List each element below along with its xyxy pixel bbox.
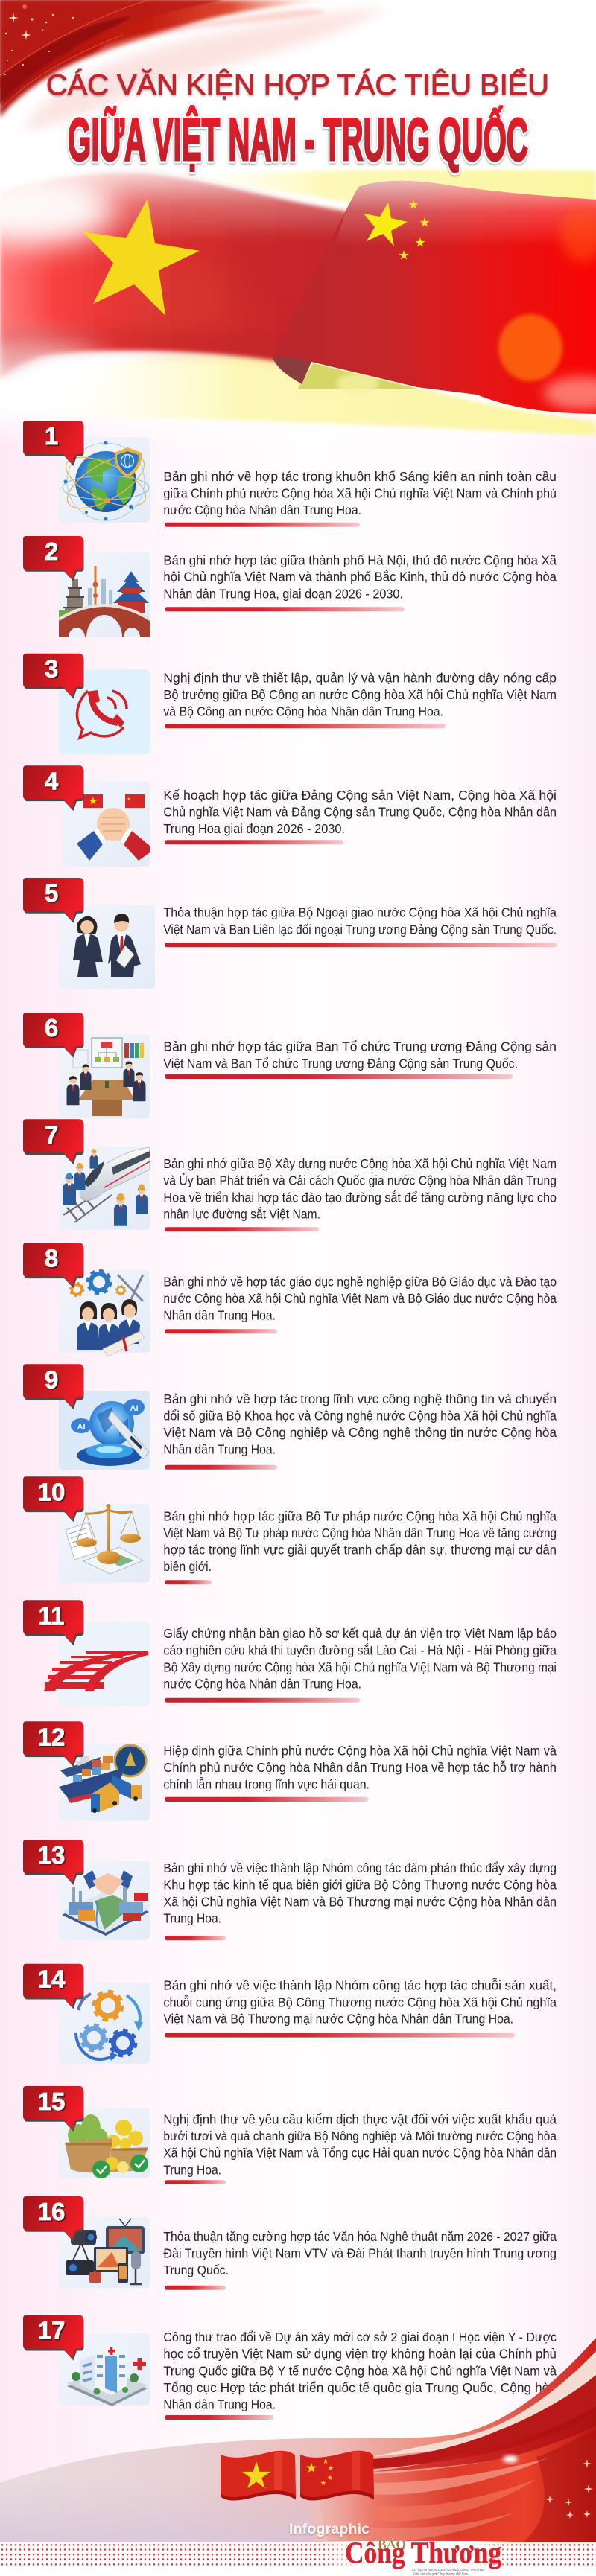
number badge 3 xyxy=(23,654,83,698)
image: globe and shield xyxy=(59,437,153,523)
number badge 5 xyxy=(23,878,83,923)
item 11 xyxy=(23,1600,557,1706)
text: Bản ghi nhớ về hợp tác giáo dục nghề nghiệp giữa Bộ Giáo dục và Đào tạo xyxy=(163,1274,557,1289)
text xyxy=(163,1156,557,1222)
text: Việt Nam và Bộ Công nghiệp và Công nghệ thông tin nước Cộng hòa xyxy=(163,1425,557,1440)
underline xyxy=(165,1580,212,1584)
number badge 4 xyxy=(23,765,83,811)
underline xyxy=(165,1936,226,1940)
number badge 2 xyxy=(23,536,83,581)
text: Bản ghi nhớ về việc thành lập Nhóm công tác đàm phán thúc đẩy xây dựng xyxy=(163,1861,557,1875)
text: Bản ghi nhớ hợp tác giữa Bộ Tư pháp nước Cộng hòa Xã hội Chủ nghĩa xyxy=(163,1508,557,1523)
item 8 xyxy=(23,1243,557,1356)
hero: China stars xyxy=(364,200,430,260)
number badge 15 xyxy=(23,2086,83,2132)
text: Chính phủ nước Cộng hòa Nhân dân Trung Hoa về hợp tác hỗ trợ hành xyxy=(163,1759,557,1775)
item 14 xyxy=(23,1964,557,2064)
footer: newspaper logo: BÁO xyxy=(378,2537,406,2551)
text: Xã hội Chủ nghĩa Việt Nam và Bộ Thương mại nước Cộng hòa Nhân dân xyxy=(163,1894,557,1909)
text xyxy=(163,788,557,836)
underline xyxy=(165,1797,368,1802)
underline xyxy=(165,523,360,527)
underline xyxy=(165,1465,277,1470)
text: Nghị định thư về yêu cầu kiểm dịch thực vật đối với việc xuất khẩu quả xyxy=(163,2112,557,2127)
number badge 17: 17 xyxy=(38,2317,65,2344)
text: Trung Hoa. xyxy=(163,1911,221,1926)
number badge 8 xyxy=(23,1243,83,1288)
text: Bộ trưởng giữa Bộ Công an nước Cộng hòa Xã hội Chủ nghĩa Việt Nam xyxy=(163,687,557,702)
text: Bộ Xây dựng nước Cộng hòa Xã hội Chủ nghĩa Việt Nam và Bộ Thương mại xyxy=(163,1660,557,1674)
text xyxy=(163,2112,557,2177)
text xyxy=(163,1391,557,1456)
number badge 2: 2 xyxy=(45,538,58,565)
number badge 13 xyxy=(23,1840,83,1885)
text: Việt Nam và Ban Liên lạc đối ngoại Trung ương Đảng Cộng sản Trung Quốc. xyxy=(163,922,557,937)
item 6 xyxy=(23,1013,557,1119)
underline xyxy=(165,2286,226,2290)
image: clasped hands with flags xyxy=(62,782,150,867)
text xyxy=(163,2330,557,2412)
item 3 xyxy=(23,654,557,754)
text: Xã hội Chủ nghĩa Việt Nam và Tổng cục Hải quan nước Cộng hòa Nhân dân xyxy=(163,2146,557,2161)
text xyxy=(163,1977,557,2027)
footer: newspaper logo: CƠ QUAN NGÔN LUẬN CỦA BỘ CÔNG THƯƠNG xyxy=(412,2567,484,2572)
text xyxy=(163,2229,557,2277)
underline xyxy=(165,724,446,728)
text: Đài Truyền hình Việt Nam VTV và Đài Phát thanh truyền hình Trung ương xyxy=(163,2246,557,2261)
image: meeting room xyxy=(59,1034,150,1119)
text: Nhân dân Trung Hoa, giai đoạn 2026 - 2030. xyxy=(163,586,403,601)
text: Trung Hoa giai đoạn 2026 - 2030. xyxy=(163,821,345,836)
number badge 7: 7 xyxy=(45,1120,58,1148)
text: cáo nghiên cứu khả thi tuyến đường sắt Lào Cai - Hà Nội - Hải Phòng giữa xyxy=(163,1642,557,1658)
text: chuỗi cung ứng giữa Bộ Công Thương nước Cộng hòa Xã hội Chủ nghĩa xyxy=(163,1994,557,2009)
text: Thỏa thuận tăng cường hợp tác Văn hóa Nghệ thuật năm 2026 - 2027 giữa xyxy=(163,2229,557,2244)
number badge 1 xyxy=(23,421,83,466)
number badge 17 xyxy=(23,2315,83,2360)
text: và Ủy ban Phát triển và Cải cách Quốc gia nước Cộng hòa Nhân dân Trung xyxy=(163,1173,557,1188)
text: Trung Quốc. xyxy=(163,2263,229,2277)
text xyxy=(163,469,557,517)
hero: Vietnam star xyxy=(83,199,200,316)
item 10 xyxy=(23,1476,557,1584)
text xyxy=(163,1039,557,1071)
item 1 xyxy=(23,421,557,527)
item 7 xyxy=(23,1119,557,1231)
number badge 16: 16 xyxy=(38,2198,65,2225)
footer: newspaper logo: Công Thương xyxy=(345,2536,501,2569)
number badge 14: 14 xyxy=(38,1966,66,1993)
number badge 7 xyxy=(23,1119,83,1164)
text: Bản ghi nhớ về hợp tác trong lĩnh vực công nghệ thông tin và chuyển xyxy=(163,1391,557,1406)
title: line 1: CÁC VĂN KIỆN HỢP TÁC TIÊU BIỂU xyxy=(46,68,549,101)
text: Bản ghi nhớ hợp tác giữa thành phố Hà Nội, thủ đô nước Cộng hòa Xã xyxy=(163,552,557,567)
image: cross-border economic zone xyxy=(59,1861,150,1940)
item 12 xyxy=(23,1721,557,1821)
image: vocational education xyxy=(59,1270,150,1356)
text: và Bộ Công an nước Cộng hòa Nhân dân Trung Hoa. xyxy=(163,704,443,718)
number badge 8: 8 xyxy=(45,1244,58,1272)
image: gears and arrows xyxy=(59,1983,150,2064)
footer: Infographic label: Infographic xyxy=(289,2522,370,2537)
image: train and workers xyxy=(59,1147,150,1230)
number badge 11 xyxy=(23,1600,83,1645)
item 13 xyxy=(23,1840,557,1940)
underline xyxy=(165,2033,515,2038)
text: Kế hoạch hợp tác giữa Đảng Cộng sản Việt Nam, Cộng hòa Xã hội xyxy=(163,788,557,803)
hero: pale yellow ribbon xyxy=(45,170,596,436)
text: biên giới. xyxy=(163,1559,212,1574)
image: two officials xyxy=(59,905,155,989)
text xyxy=(163,1274,557,1322)
text: hội Chủ nghĩa Việt Nam và thành phố Bắc Kinh, thủ đô nước Cộng hòa xyxy=(163,569,557,584)
text: Hiệp định giữa Chính phủ nước Cộng hòa Xã hội Chủ nghĩa Việt Nam và xyxy=(163,1743,557,1758)
footer: dotted band xyxy=(0,2541,596,2576)
underline xyxy=(165,1698,360,1703)
text: Chủ nghĩa Việt Nam và Đảng Cộng sản Trung Quốc, Cộng hòa Nhân dân xyxy=(163,805,557,820)
text: Việt Nam và Bộ Thương mại nước Cộng hòa Nhân dân Trung Hoa. xyxy=(163,2012,513,2027)
item 15 xyxy=(23,2086,557,2184)
text: Nhân dân Trung Hoa. xyxy=(163,2397,276,2412)
footer xyxy=(0,2338,596,2576)
text: nước Cộng hòa Nhân dân Trung Hoa. xyxy=(163,503,361,517)
text: nước Cộng hòa Nhân dân Trung Hoa. xyxy=(163,1677,361,1692)
text: Trung Hoa. xyxy=(163,2162,221,2177)
number badge 9 xyxy=(23,1364,83,1409)
text: Hoa về triển khai hợp tác đào tạo đường sắt để tăng cường năng lực cho xyxy=(163,1189,557,1205)
image: red railway xyxy=(44,1622,150,1706)
item 5 xyxy=(23,878,557,989)
footer: China flag xyxy=(300,2451,374,2500)
image: fruit baskets xyxy=(59,2108,150,2178)
item 4 xyxy=(23,765,557,867)
text: Tổng cục Hợp tác phát triển quốc tế quốc gia Trung Quốc, Cộng hòa xyxy=(163,2380,557,2395)
item 2 xyxy=(23,536,557,637)
number badge 10 xyxy=(23,1476,83,1522)
text: chính lẫn nhau trong lĩnh vực hải quan. xyxy=(163,1776,370,1792)
image: digital globe and robot hand: AI xyxy=(130,1404,139,1413)
text: đổi số giữa Bộ Khoa học và Công nghệ nước Cộng hòa Xã hội Chủ nghĩa xyxy=(163,1408,557,1423)
footer: newspaper logo: Diễn đàn của giới Công thương Việt Nam xyxy=(413,2572,468,2576)
hero: China flag xyxy=(273,181,596,414)
number badge 3: 3 xyxy=(45,655,58,683)
image: broadcast equipment xyxy=(59,2217,150,2288)
number badge 6: 6 xyxy=(45,1014,58,1042)
text: Công thư trao đổi về Dự án xây mới cơ sở 2 giai đoạn I Học viện Y - Dược xyxy=(163,2330,557,2344)
text: Bản ghi nhớ về việc thành lập Nhóm công tác hợp tác chuỗi sản xuất, xyxy=(163,1977,557,1993)
text: giữa Chính phủ nước Cộng hòa Xã hội Chủ nghĩa Việt Nam và Chính phủ xyxy=(163,485,557,500)
number badge 14 xyxy=(23,1964,83,2009)
text xyxy=(163,1743,557,1792)
underline xyxy=(165,2180,226,2184)
image: scales of justice xyxy=(59,1504,150,1583)
text: nhân lực đường sắt Việt Nam. xyxy=(163,1206,320,1222)
footer: wave background xyxy=(0,2338,596,2543)
text xyxy=(163,905,557,937)
underline xyxy=(165,607,405,611)
underline xyxy=(165,1074,513,1079)
underline xyxy=(165,1329,277,1333)
image: Hanoi and Beijing landmarks xyxy=(59,552,150,637)
underline xyxy=(165,1227,319,1231)
text: Nghị định thư về thiết lập, quản lý và vận hành đường dây nóng cấp xyxy=(163,670,557,685)
image: digital globe and robot hand: AI xyxy=(77,1423,85,1432)
text: Bản ghi nhớ hợp tác giữa Ban Tổ chức Trung ương Đảng Cộng sản xyxy=(163,1039,557,1054)
text: hợp tác trong lĩnh vực giải quyết tranh chấp dân sự, thương mại cư dân xyxy=(163,1543,557,1558)
text xyxy=(163,1861,557,1926)
image: digital globe and robot hand xyxy=(59,1391,150,1470)
image: hospital xyxy=(59,2333,150,2406)
number badge 11: 11 xyxy=(39,1601,64,1629)
number badge 9: 9 xyxy=(45,1365,58,1393)
underline xyxy=(165,840,343,844)
text: Giấy chứng nhận bàn giao hồ sơ kết quả dự án viện trợ Việt Nam lập báo xyxy=(163,1626,557,1641)
number badge 12 xyxy=(23,1721,83,1767)
hero: red swoosh top left xyxy=(0,0,387,130)
underline xyxy=(165,2415,273,2420)
text: học cổ truyền Việt Nam sử dụng viện trợ không hoàn lại của Chính phủ xyxy=(163,2347,557,2362)
number badge 6 xyxy=(23,1013,83,1058)
image: ships, containers and trucks xyxy=(59,1743,150,1821)
number badge 4: 4 xyxy=(45,767,59,794)
text: Bản ghi nhớ giữa Bộ Xây dựng nước Cộng hòa Xã hội Chủ nghĩa Việt Nam xyxy=(163,1156,557,1171)
number badge 15: 15 xyxy=(38,2088,65,2115)
text: Việt Nam và Ban Tổ chức Trung ương Đảng Cộng sản Trung Quốc. xyxy=(163,1056,518,1071)
underline xyxy=(165,943,557,947)
hero banner xyxy=(0,0,596,447)
text xyxy=(163,552,557,601)
hero: Vietnam flag xyxy=(0,169,350,404)
text: bưởi tươi và quả chanh giữa Bộ Nông nghiệp và Môi trường nước Cộng hòa xyxy=(163,2129,557,2143)
number badge 13: 13 xyxy=(38,1841,65,1869)
text: Khu hợp tác kinh tế qua biên giới giữa Bộ Công Thương nước Cộng hòa xyxy=(163,1878,557,1893)
number badge 1: 1 xyxy=(45,422,58,450)
text: Bản ghi nhớ về hợp tác trong khuôn khổ Sáng kiến an ninh toàn cầu xyxy=(163,469,557,484)
number badge 12: 12 xyxy=(38,1723,65,1750)
number badge 5: 5 xyxy=(45,879,58,907)
text: Nhân dân Trung Hoa. xyxy=(163,1307,276,1322)
number badge 10: 10 xyxy=(38,1478,65,1505)
text: Nhân dân Trung Hoa. xyxy=(163,1441,276,1456)
number badge 16 xyxy=(23,2196,83,2242)
item 17 xyxy=(23,2315,557,2420)
text: Trung Quốc giữa Bộ Y tế nước Cộng hòa Xã hội Chủ nghĩa Việt Nam và xyxy=(163,2363,557,2378)
text: nước Cộng hòa Xã hội Chủ nghĩa Việt Nam và Bộ Giáo dục nước Cộng hòa xyxy=(163,1291,557,1306)
text: Thỏa thuận hợp tác giữa Bộ Ngoại giao nước Cộng hòa Xã hội Chủ nghĩa xyxy=(163,905,557,920)
item 9 xyxy=(23,1364,557,1470)
text xyxy=(163,670,557,718)
footer: Vietnam flag xyxy=(221,2451,296,2500)
image: hotline phone xyxy=(59,669,150,754)
text xyxy=(163,1626,557,1692)
text xyxy=(163,1508,557,1574)
item 16 xyxy=(23,2196,557,2290)
